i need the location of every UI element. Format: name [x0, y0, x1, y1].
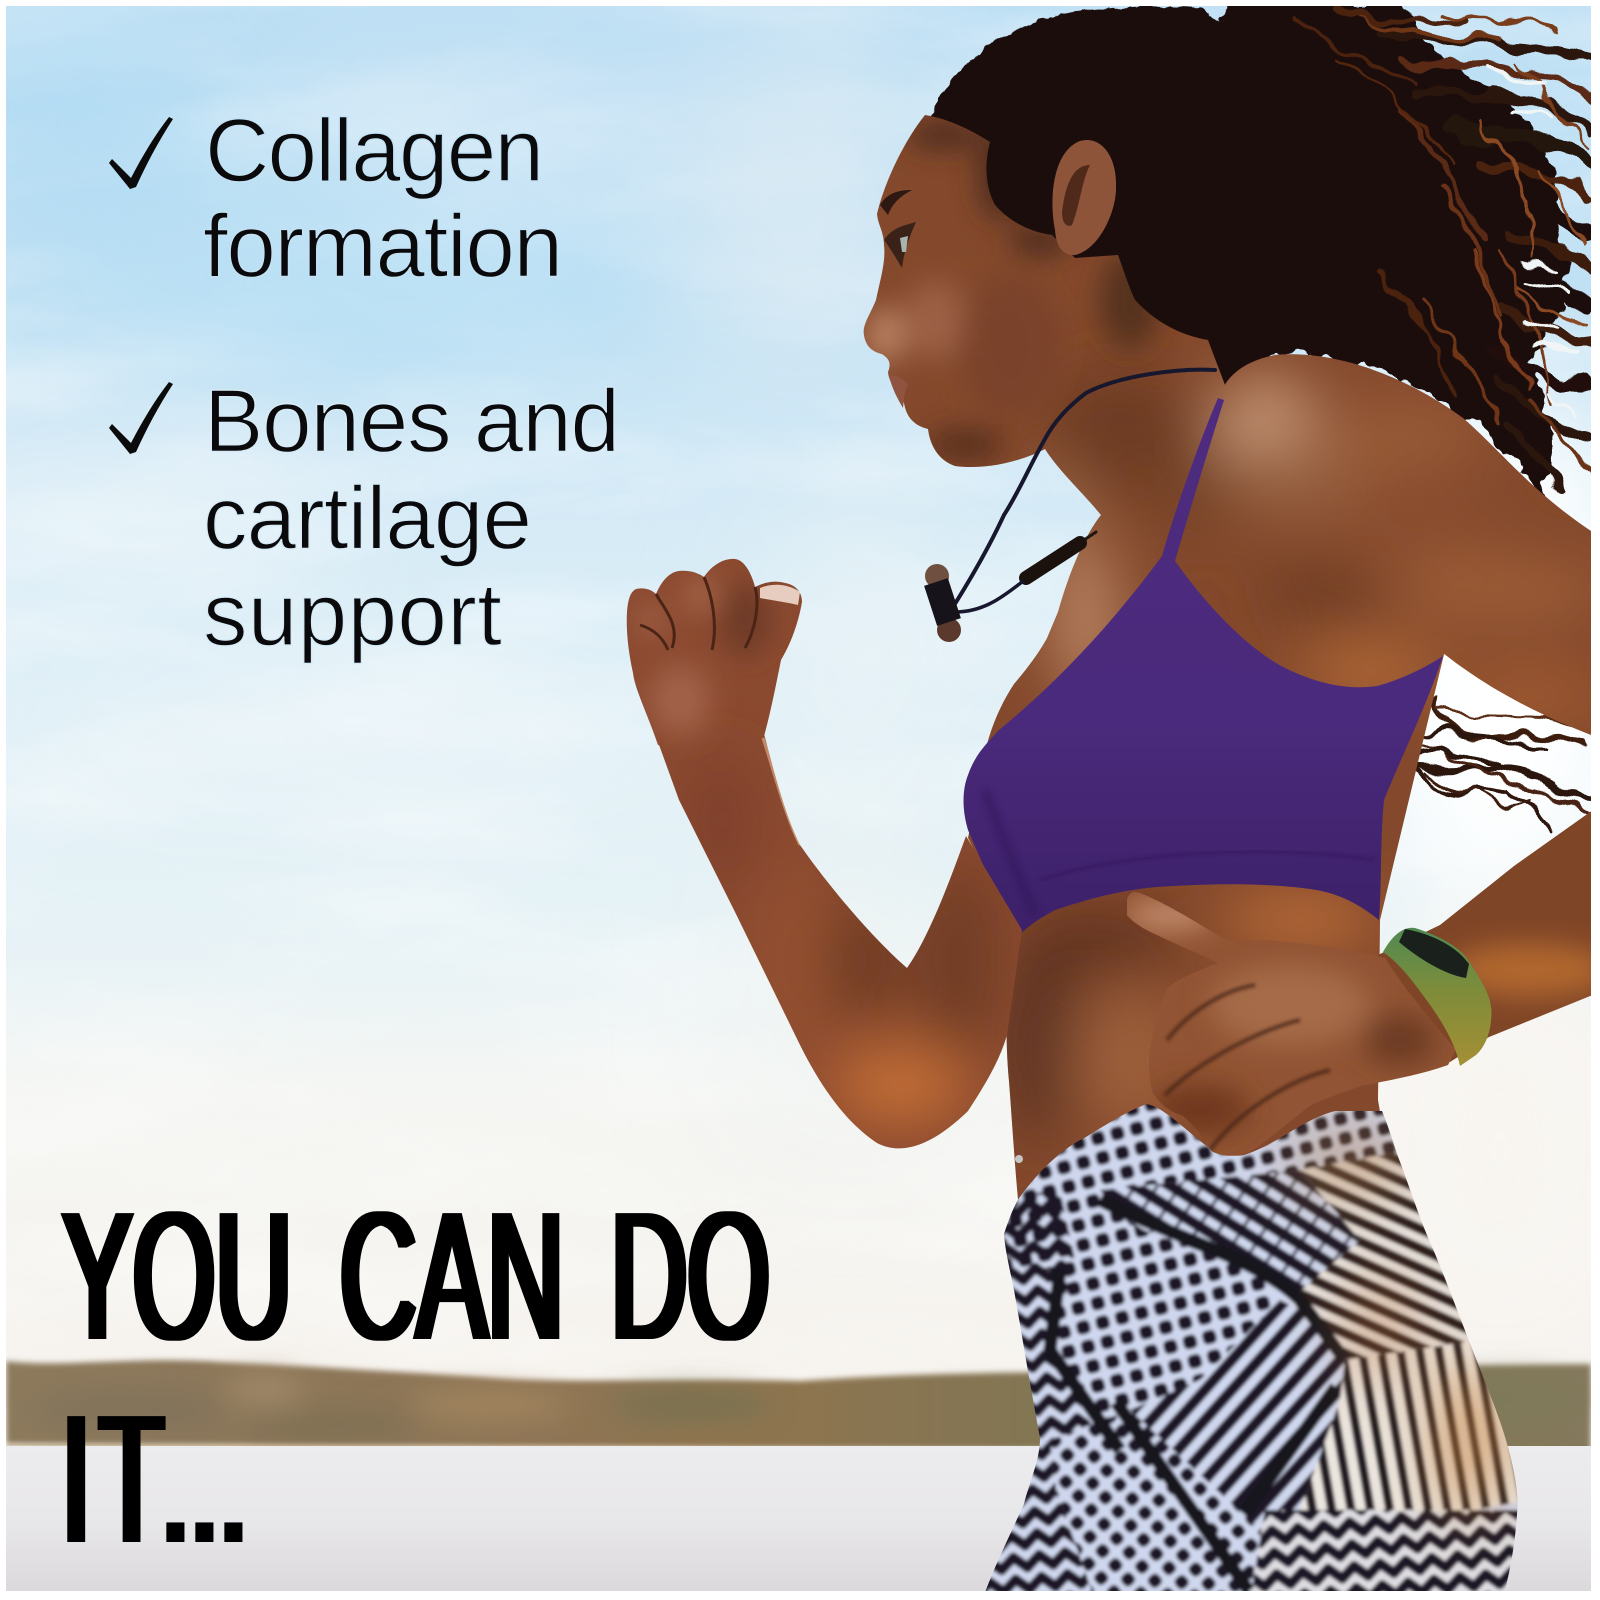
- eyebrow: [880, 190, 912, 215]
- water: [6, 1446, 1591, 1592]
- facial features: [880, 190, 916, 408]
- shading: abdomen: [1000, 940, 1080, 1140]
- finger creases: [640, 577, 757, 650]
- headline: YOU CAN DO IT...: CAN: [340, 1174, 564, 1378]
- icon: check mark: [109, 382, 173, 454]
- leggings pattern: up diagonal stripes: [1130, 1300, 1360, 1535]
- text: Bones and cartilage support: cartilage: [203, 468, 532, 568]
- shading: neck and chest: [1050, 370, 1190, 490]
- leggings pattern: left zigzag edge: [980, 1190, 1100, 1520]
- text: Bones and cartilage support: support: [203, 564, 502, 664]
- finger lines: [1165, 985, 1330, 1150]
- headline: YOU CAN DO IT...: DO: [611, 1174, 770, 1378]
- purple sports bra: [964, 398, 1443, 935]
- forearm reaching to the right edge: [1370, 800, 1600, 1070]
- lips: [889, 375, 908, 408]
- hand resting on the waistband: [1120, 885, 1465, 1165]
- hair curls and strands: [1290, 6, 1591, 490]
- leggings pattern: lower right zigzag: [1250, 1510, 1530, 1600]
- text: Collagen formation: formation: [203, 196, 563, 296]
- front arm and clenched fist: [620, 550, 1050, 1170]
- distant hills: [6, 1360, 1591, 1454]
- benefit: collagen formation: [109, 100, 567, 296]
- leggings pattern: vertical stripes: [1300, 1340, 1530, 1520]
- icon: check mark: [109, 117, 173, 189]
- shading: shoulder and back arm: [1215, 375, 1315, 475]
- leggings pattern: waistband: [970, 1090, 1530, 1270]
- leggings pattern: down stripes: [1100, 1170, 1360, 1300]
- benefit list: [109, 100, 644, 664]
- benefit: bones and cartilage support: [109, 370, 644, 664]
- headline: YOU CAN DO IT...: IT...: [61, 1377, 248, 1581]
- fitness band on the wrist: [1383, 928, 1492, 1066]
- ponytail silhouette: [1180, 2, 1566, 495]
- leggings pattern: lower left zigzag: [970, 1480, 1095, 1600]
- text: Bones and cartilage support: Bones and: [204, 370, 620, 470]
- navel piercing: [1015, 1155, 1023, 1163]
- sky gaps between curls: [1490, 70, 1575, 420]
- headphone cable and earbud: [925, 370, 1215, 642]
- leggings pattern: hip dots: [1050, 1220, 1280, 1450]
- patterned leggings: [970, 1090, 1530, 1600]
- hair tendrils behind the arm: [1405, 690, 1591, 832]
- eye: [884, 222, 916, 268]
- leggings pattern: lower dots: [1050, 1410, 1260, 1600]
- text: Collagen formation: Collagen: [205, 100, 544, 200]
- ear: [1053, 140, 1116, 255]
- body: head, neck, torso and back arm: [850, 100, 1600, 1230]
- hair: curly ponytail mass: [930, 2, 1591, 495]
- head cap of hair: [930, 6, 1228, 385]
- headline: YOU CAN DO IT...: [61, 1174, 770, 1581]
- shading: face: [905, 121, 985, 149]
- leggings pattern: right hip stripes: [1290, 1150, 1480, 1360]
- headline: YOU CAN DO IT...: YOU: [62, 1174, 292, 1378]
